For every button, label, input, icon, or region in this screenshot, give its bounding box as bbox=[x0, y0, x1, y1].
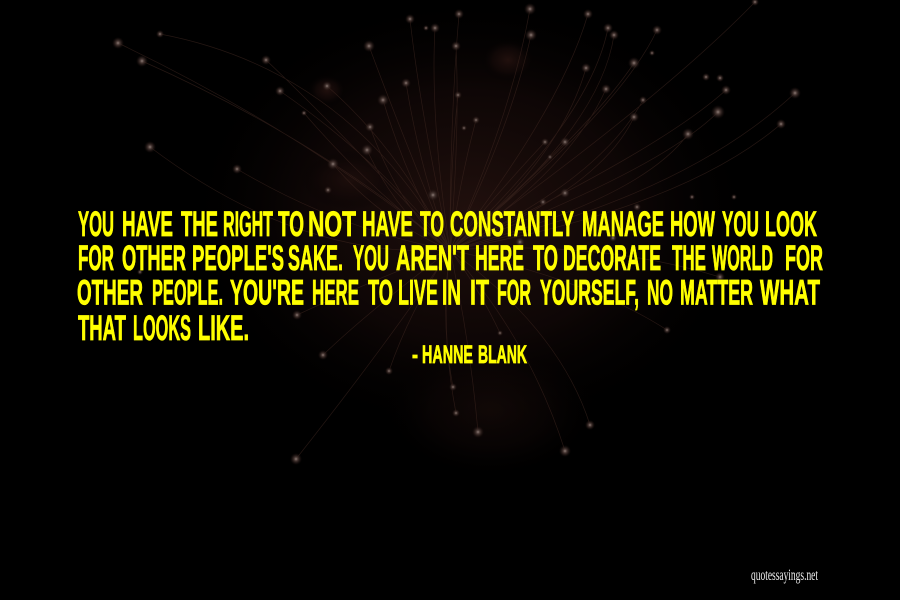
quote text: FOR bbox=[78, 239, 114, 278]
quote text: YOU'RE bbox=[230, 274, 304, 312]
quote text: PEOPLE. bbox=[152, 274, 223, 312]
quote text: LIKE. bbox=[198, 309, 249, 348]
quote text: PEOPLE'S bbox=[192, 239, 284, 278]
quote text: RIGHT bbox=[223, 205, 273, 244]
quote text: YOU bbox=[722, 205, 759, 244]
quote text: TO bbox=[368, 274, 393, 312]
quote text: IN bbox=[442, 274, 461, 312]
quote text: HAVE bbox=[362, 205, 413, 244]
quote text: NOT bbox=[308, 205, 356, 244]
author attribution: - bbox=[412, 341, 418, 369]
quote text: MATTER bbox=[680, 274, 753, 312]
quote text: WHAT bbox=[760, 274, 820, 312]
quote text: TO bbox=[420, 205, 444, 244]
quote text: LOOKS bbox=[133, 309, 191, 348]
quote text: THE bbox=[181, 205, 218, 244]
author attribution: BLANK bbox=[478, 341, 527, 369]
quote text: NO bbox=[647, 274, 673, 312]
quote text: HERE bbox=[475, 239, 524, 278]
quote text: YOU bbox=[78, 205, 114, 244]
quote text: LOOK bbox=[765, 205, 817, 244]
quote text: CONSTANTLY bbox=[450, 205, 574, 244]
quote text: AREN'T bbox=[396, 239, 469, 278]
quote text bbox=[77, 205, 823, 348]
quote text: IT bbox=[470, 274, 489, 312]
quote text: LIVE bbox=[398, 274, 438, 312]
quote text: YOU bbox=[353, 239, 389, 278]
quote text: THE bbox=[672, 239, 706, 278]
quote text: MANAGE bbox=[582, 205, 664, 244]
quote text: SAKE. bbox=[288, 239, 343, 278]
quote text: TO bbox=[533, 239, 558, 278]
firework sparks bbox=[112, 0, 801, 465]
author attribution: HANNE bbox=[422, 341, 473, 369]
quote text: OTHER bbox=[77, 274, 143, 312]
quote text: FOR bbox=[785, 239, 823, 278]
quote text: THAT bbox=[78, 309, 126, 348]
quote text: HAVE bbox=[122, 205, 173, 244]
quote text: YOURSELF, bbox=[540, 274, 639, 312]
quote text: WORLD bbox=[712, 239, 773, 278]
quote text: DECORATE bbox=[563, 239, 661, 278]
quote text: HERE bbox=[312, 274, 359, 312]
quote text: TO bbox=[278, 205, 304, 244]
watermark: quotessayings.net bbox=[751, 567, 818, 584]
quote text: HOW bbox=[670, 205, 715, 244]
quote text: OTHER bbox=[122, 239, 186, 278]
quote text: FOR bbox=[497, 274, 531, 312]
